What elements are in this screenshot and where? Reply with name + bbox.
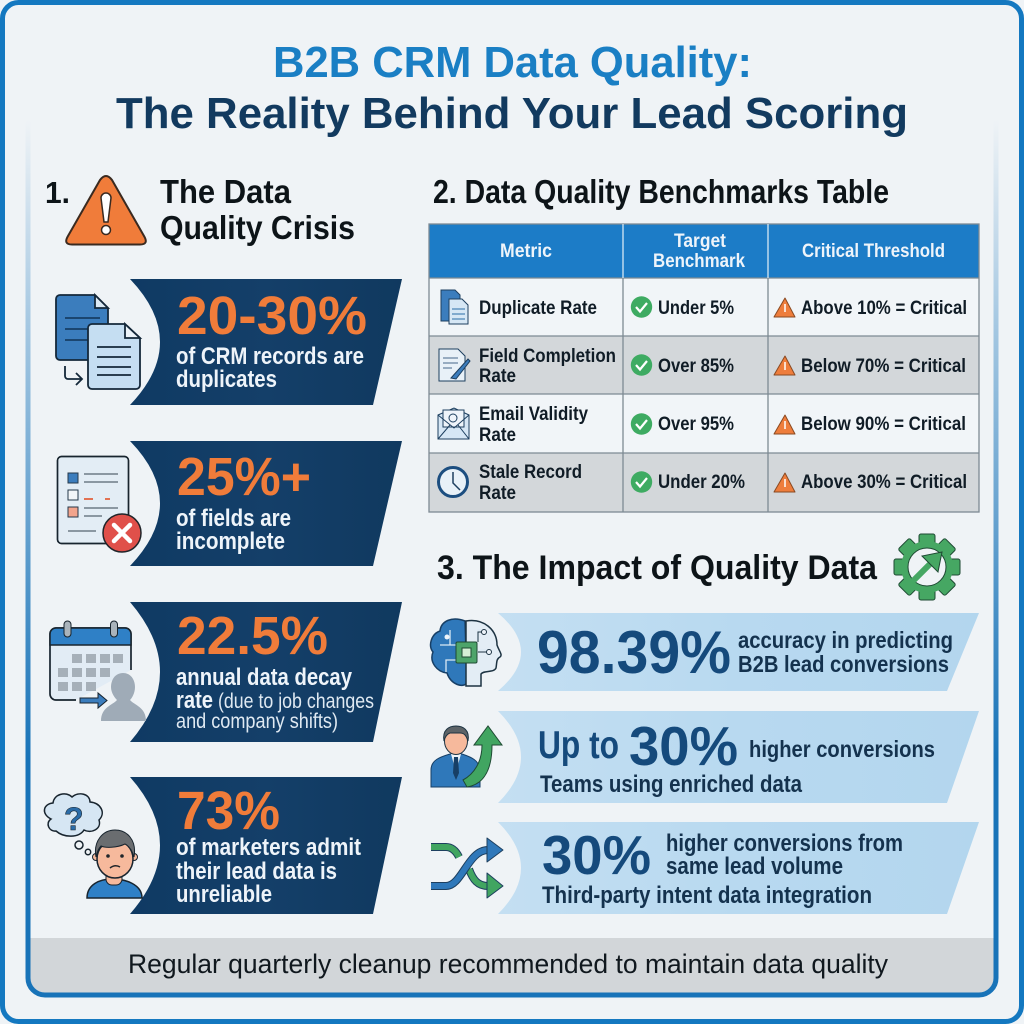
icon: AI brain	[431, 619, 501, 686]
row: email validity rate: Over 95%	[658, 414, 734, 435]
section 3 heading: 3. The Impact of Quality Data	[437, 549, 878, 587]
row: duplicate rate: Above 10% = Critical	[801, 298, 967, 319]
section 2 heading: 2. Data Quality Benchmarks Table	[433, 173, 889, 210]
title: B2B CRM Data Quality:	[273, 38, 752, 87]
icon: duplicate documents	[56, 295, 140, 389]
row: duplicate rate: Duplicate Rate	[479, 298, 597, 319]
panel: impact of quality data	[431, 534, 979, 914]
row: email validity rate: Rate	[479, 425, 516, 446]
icon: incomplete form	[58, 456, 141, 552]
stat: duplicates: 20-30%	[177, 286, 367, 346]
panel: benchmarks table	[429, 173, 979, 512]
stat: intent data: higher conversions from	[666, 830, 903, 857]
row: email validity rate	[438, 404, 966, 446]
stat: data decay: 22.5%	[177, 606, 328, 666]
table header: Target	[674, 231, 727, 252]
row: stale record rate: Above 30% = Critical	[801, 472, 967, 493]
row: stale record rate: Under 20%	[658, 472, 745, 493]
stat: incomplete fields: of fields are	[176, 505, 291, 532]
row: stale record rate	[438, 462, 967, 504]
stat: unreliable lead data: of marketers admit	[176, 834, 361, 861]
section 1 heading: 1.	[45, 175, 70, 210]
title: The Reality Behind Your Lead Scoring	[116, 89, 908, 138]
stat: duplicates: of CRM records are	[176, 343, 364, 370]
icon: confused person	[44, 794, 142, 898]
stat: duplicates: duplicates	[176, 366, 277, 393]
stat: unreliable lead data: their lead data is	[176, 858, 337, 885]
stat: data decay: annual data decay	[176, 664, 353, 691]
row: stale record rate: Stale Record	[479, 462, 582, 483]
stat: incomplete fields	[130, 441, 402, 566]
table	[429, 224, 979, 512]
stat: data decay: rate	[176, 687, 213, 714]
row: field completion rate: Over 85%	[658, 356, 734, 377]
row: email validity rate: Below 90% = Critical	[801, 414, 966, 435]
stat: enriched data: 30%	[629, 715, 738, 777]
stat: prediction accuracy: B2B lead conversions	[738, 651, 949, 677]
table header: Metric	[500, 241, 552, 262]
stat: enriched data: Teams using enriched data	[540, 771, 803, 798]
section 1 heading: Quality Crisis	[160, 209, 355, 246]
row: duplicate rate	[441, 290, 967, 324]
section 1 heading: The Data	[160, 173, 292, 210]
icon: confused person: ?	[64, 801, 84, 837]
icon: gear with arrow	[894, 534, 960, 600]
icon: businessman with rising arrow	[431, 726, 502, 787]
stat: data decay: (due to job changes	[218, 690, 374, 713]
table header: Benchmark	[653, 251, 745, 272]
footer bar	[28, 938, 996, 994]
stat: prediction accuracy: 98.39%	[537, 619, 731, 686]
row: duplicate rate: Under 5%	[658, 298, 734, 319]
stat: enriched data: Up to	[538, 724, 619, 767]
table header: Critical Threshold	[802, 241, 945, 262]
stat: incomplete fields: 25%+	[177, 447, 311, 507]
row: email validity rate: Email Validity	[479, 404, 588, 425]
table header	[500, 231, 945, 272]
row: field completion rate: Below 70% = Critical	[801, 356, 966, 377]
panel: data quality crisis	[44, 173, 402, 914]
stat: intent data: 30%	[542, 824, 651, 886]
stat: enriched data: higher conversions	[749, 736, 935, 762]
stat: unreliable lead data: unreliable	[176, 881, 272, 908]
stat: data decay: and company shifts)	[176, 710, 338, 733]
stat: intent data: Third-party intent data integration	[542, 882, 872, 909]
icon: calendar and person	[50, 621, 146, 721]
stat: intent data: same lead volume	[666, 853, 843, 880]
row: stale record rate: Rate	[479, 483, 516, 504]
row: field completion rate	[439, 346, 966, 387]
stat: data decay	[130, 602, 402, 742]
stat: prediction accuracy: accuracy in predicting	[738, 627, 953, 653]
stat: incomplete fields: incomplete	[176, 528, 285, 555]
stat: duplicates	[130, 279, 402, 405]
stat: enriched data	[498, 711, 979, 803]
stat: intent data	[498, 822, 979, 914]
stat: prediction accuracy	[498, 613, 979, 691]
icon: shuffle arrows	[431, 838, 503, 898]
row: field completion rate: Field Completion	[479, 346, 616, 367]
footer bar: Regular quarterly cleanup recommended to maintain data quality	[128, 949, 888, 979]
section 1 heading	[45, 173, 355, 246]
stat: unreliable lead data: 73%	[177, 781, 280, 841]
title	[116, 38, 908, 138]
row: field completion rate: Rate	[479, 366, 516, 387]
stat: unreliable lead data	[130, 777, 402, 914]
